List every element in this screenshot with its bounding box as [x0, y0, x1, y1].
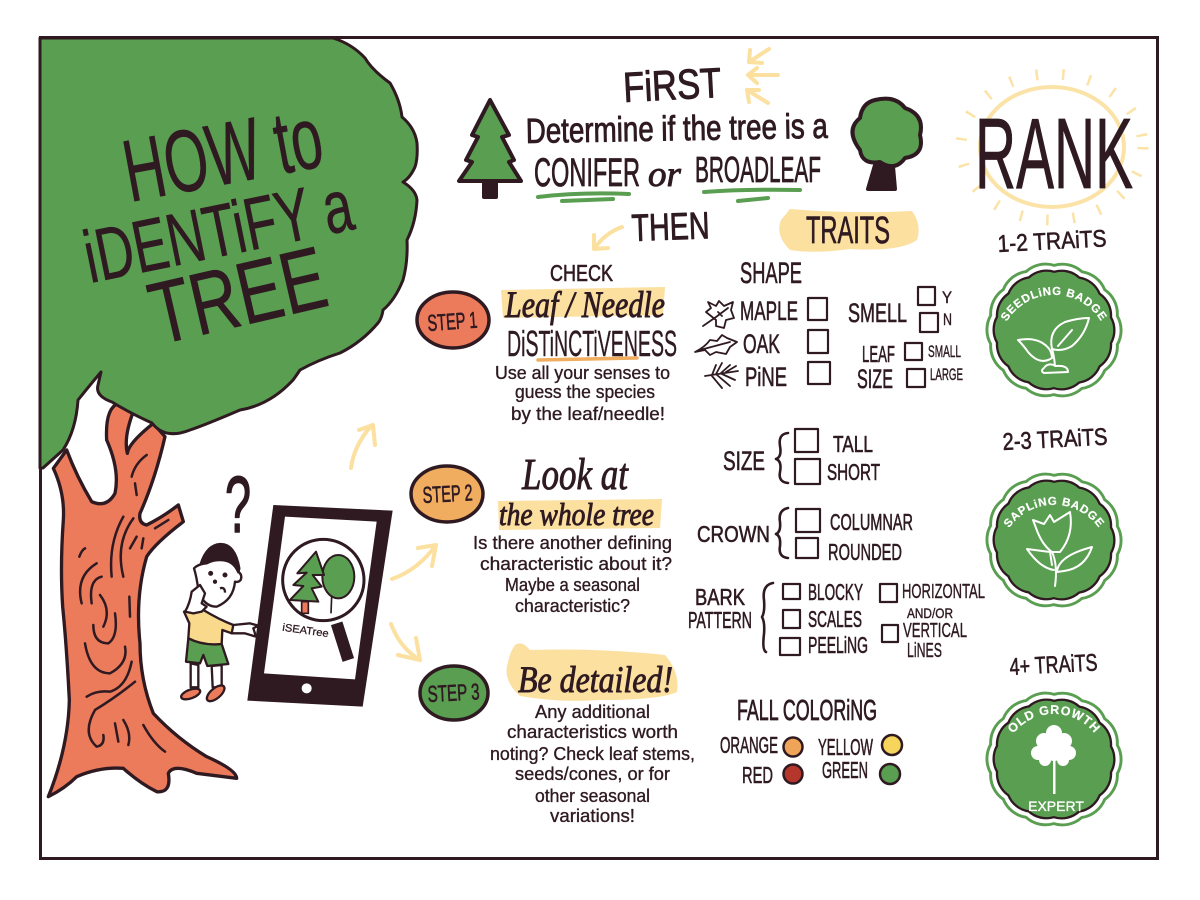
icon: oak leaf: [695, 335, 737, 355]
bark options: PEELiNG: [808, 632, 868, 658]
sun graphic: [961, 74, 1143, 220]
first arrows: [747, 49, 778, 103]
leaf size options: LARGE: [930, 365, 963, 384]
icon: white tree: [1031, 725, 1076, 794]
crown options: [796, 509, 913, 565]
smell options: N: [943, 310, 952, 329]
title line: How to: HOW to: [115, 87, 330, 221]
size options: [795, 429, 880, 485]
text: determine: Determine if the tree is a: [525, 107, 829, 151]
size label: SIZE: [723, 446, 765, 476]
step 2 description: Maybe a seasonal: [505, 575, 640, 595]
question mark: ?: [225, 460, 251, 549]
expert label: EXPERT: [1028, 798, 1084, 814]
shape options: MAPLE: [740, 296, 798, 326]
trait group: leaf size: SIZE: [857, 364, 893, 394]
badge: old growth expert: OLD GROWTH: [1008, 705, 1100, 733]
step 3 description: noting? Check leaf stems,: [490, 744, 695, 764]
step 2 description: characteristic?: [515, 596, 630, 616]
bark options: BLOCKY: [808, 579, 863, 605]
step 1 label: STEP 1: [427, 307, 478, 336]
look at: Look at: [521, 450, 629, 499]
text: conifer or broadleaf: [534, 149, 821, 195]
leaf size options: [905, 342, 963, 387]
icon: maple leaf: [703, 301, 734, 328]
fall coloring heading: FALL COLORiNG: [737, 695, 877, 727]
size options: TALL: [833, 431, 873, 457]
step 3 blob: [420, 666, 488, 720]
step 2: [411, 450, 672, 616]
step 1: [417, 260, 677, 424]
then arrow: [594, 227, 622, 249]
color swatches: RED: [742, 762, 773, 788]
bark options: AND/OR: [907, 605, 953, 621]
step 2 description: characteristic about it?: [480, 554, 672, 574]
smell options: [918, 287, 952, 332]
illustration: phone: [247, 505, 393, 707]
step 3 label: STEP 3: [427, 678, 480, 707]
color swatches: GREEN: [822, 757, 868, 783]
smell label: SMELL: [848, 298, 907, 328]
icon: sapling: [1027, 512, 1092, 586]
trait group: crown: [697, 508, 913, 565]
crown options: COLUMNAR: [830, 509, 913, 535]
shape options: OAK: [743, 329, 780, 359]
underline: [538, 358, 637, 360]
step 1 description: Use all your senses to: [495, 363, 670, 383]
leaf size options: SMALL: [928, 342, 961, 361]
size options: SHORT: [827, 459, 880, 485]
bark options: LiNES: [907, 640, 942, 662]
title: [77, 87, 360, 364]
traits highlight: [779, 209, 919, 252]
be detailed: Be detailed!: [518, 660, 673, 701]
step 3 description: variations!: [550, 806, 635, 826]
bark pattern label: BARK: [695, 584, 746, 610]
illustration: phone: iSEATree: [282, 622, 330, 640]
smell options: Y: [942, 288, 952, 307]
step 2 description: Is there another defining: [473, 533, 672, 553]
shape options: PiNE: [745, 362, 787, 392]
bark options: VERTICAL: [903, 620, 967, 642]
badge: sapling: [985, 472, 1122, 608]
rank label: 2-3 traits: 2-3 TRAiTS: [1002, 424, 1108, 456]
trait group: bark pattern: [688, 579, 985, 662]
trait group: size: [723, 429, 880, 485]
broadleaf label: BROADLEAF: [695, 149, 821, 190]
step 3 description: characteristics worth: [507, 722, 678, 742]
shape heading: SHAPE: [740, 257, 802, 290]
rank label: 1-2 traits: 1-2 TRAiTS: [997, 225, 1107, 258]
step 3 description: [490, 702, 695, 826]
illustration: person: [180, 544, 258, 704]
leaf/needle: Leaf / Needle: [504, 285, 665, 326]
title line: identify a: iDENTiFY a: [77, 163, 360, 299]
step 3 description: Any additional: [535, 702, 650, 722]
step 3 description: seeds/cones, or for: [515, 764, 670, 784]
icon: broadleaf tree: [852, 99, 921, 189]
or label: or: [648, 154, 682, 194]
badge: old growth expert: [985, 692, 1123, 826]
crown label: CROWN: [697, 521, 770, 547]
icon: conifer: [459, 100, 521, 197]
step 1 description: by the leaf/needle!: [511, 404, 665, 424]
bark pattern label: PATTERN: [688, 607, 752, 633]
highlight: [506, 643, 678, 701]
step 1 description: [495, 363, 670, 424]
heading: first: FiRST: [622, 59, 722, 111]
green underlines: [538, 190, 800, 201]
leaf size label: LEAF: [862, 341, 895, 367]
heading: traits: TRAITS: [806, 210, 890, 252]
trait group: leaf size: [857, 341, 963, 394]
badge: sapling: SAPLiNG BADGE: [1004, 496, 1104, 528]
trait group: fall coloring: [720, 695, 902, 788]
crown options: ROUNDED: [828, 539, 902, 565]
step 1 description: guess the species: [515, 382, 655, 402]
badge: seedling: SEEDLiNG BADGE: [1001, 286, 1108, 321]
color swatches: YELLOW: [818, 734, 873, 760]
trait group: smell: [848, 287, 952, 332]
arrows from phone to steps: [351, 425, 436, 660]
icon: seedling: [1018, 318, 1089, 373]
bark options: SCALES: [808, 606, 862, 632]
illustration: tree trunk: [48, 403, 237, 797]
step 3 description: other seasonal: [535, 786, 650, 806]
illustration: tree crown: [40, 38, 417, 468]
color swatches: [720, 732, 902, 788]
badge: seedling: [985, 262, 1122, 398]
highlight: [501, 287, 665, 318]
conifer label: CONIFER: [534, 151, 640, 195]
trait group: shape: [695, 257, 830, 392]
highlight: [498, 499, 662, 530]
shape options: [740, 296, 830, 392]
step 2 label: STEP 2: [422, 479, 473, 508]
brace: [776, 508, 788, 558]
step 3: [420, 643, 695, 826]
heading: then: THEN: [631, 205, 710, 250]
step 2 blob: [411, 466, 483, 522]
bark options: HORIZONTAL: [902, 581, 985, 603]
distinctiveness: DiSTiNCTiVENESS: [507, 323, 677, 364]
color swatches: ORANGE: [720, 732, 778, 758]
rank label: 4+ traits: 4+ TRAiTS: [1009, 649, 1098, 681]
bark options: [780, 579, 985, 662]
brace: [776, 433, 788, 483]
the whole tree: the whole tree: [499, 496, 654, 532]
icon: pine sprig: [705, 363, 738, 388]
brace: [762, 583, 773, 652]
bark pattern label: [688, 584, 752, 633]
step 2 description: [473, 533, 672, 616]
title line: tree: TREE: [140, 227, 336, 364]
check: CHECK: [550, 260, 614, 286]
step 1 blob: [417, 292, 489, 348]
